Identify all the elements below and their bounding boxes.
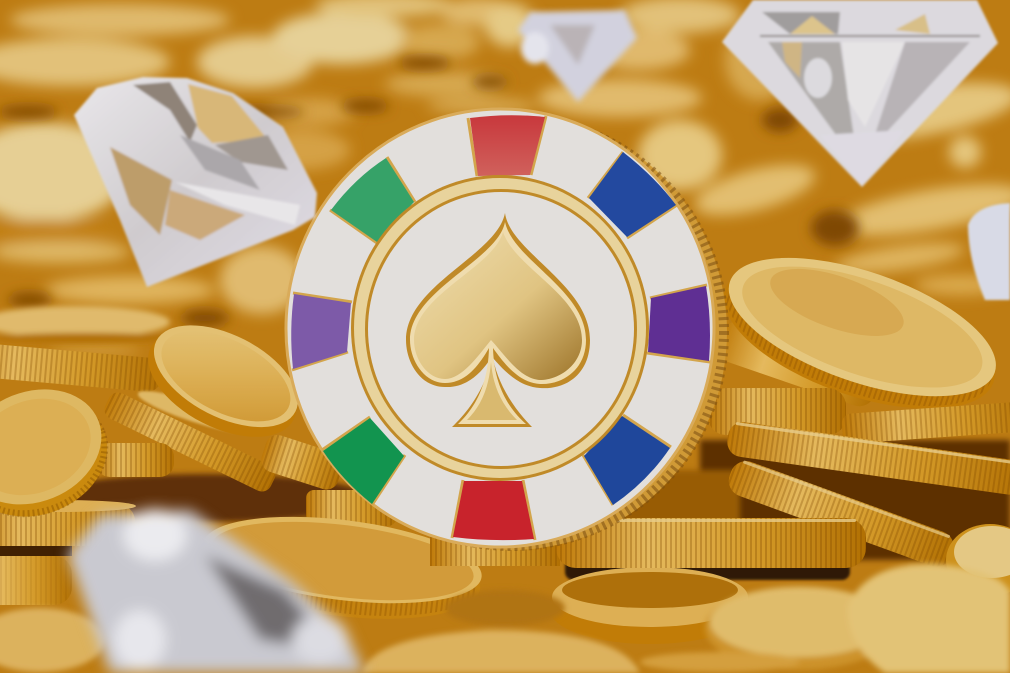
poker chip bbox=[275, 98, 727, 558]
facet: crown gold bbox=[790, 16, 835, 34]
coin: bottom blurred bbox=[362, 564, 1010, 673]
coin: ribbed strip by chip bbox=[258, 432, 346, 493]
facet: girdle bbox=[760, 35, 980, 37]
coin: ribbed short bbox=[708, 388, 846, 435]
facet: dark reflection bbox=[133, 82, 197, 142]
facet: lower gold right bbox=[165, 190, 245, 240]
diamond: upper right bbox=[722, 0, 998, 187]
facet: white kite bbox=[842, 42, 905, 127]
chip: reeded gold rim bbox=[295, 114, 727, 550]
coin: ribbed long bbox=[725, 420, 1010, 497]
facet: white blob bbox=[804, 58, 832, 98]
coin: lower left ribbed bbox=[0, 500, 136, 546]
coin: bottom left blurred bbox=[0, 608, 105, 672]
facet: pavilion right bbox=[870, 42, 970, 150]
dark gap under horizontal coin bbox=[565, 558, 850, 580]
facet: pavilion grey left bbox=[768, 42, 858, 165]
coins: left pile bbox=[0, 303, 486, 672]
coin: ribbed slanted bbox=[724, 457, 958, 571]
coin: left mid bbox=[131, 303, 316, 459]
coin: center bottom bbox=[550, 567, 750, 644]
coin: small ribbed strip bbox=[96, 443, 174, 477]
coin: horizontal ribbed bbox=[556, 518, 866, 568]
coin: right edge face bbox=[946, 524, 1010, 596]
chip: gold inner ring bbox=[351, 175, 649, 481]
background: dark gaps bbox=[0, 57, 859, 326]
coin: tilted ribbed strip bbox=[101, 389, 279, 495]
diamond: right edge bbox=[968, 203, 1010, 300]
facet: light bar bbox=[175, 182, 300, 225]
icon: gold spade bbox=[406, 213, 590, 427]
facet: lavender lower bbox=[820, 130, 905, 185]
coin: ribbed strip top left bbox=[0, 340, 163, 393]
facet: gold window bbox=[188, 84, 268, 143]
facet: crown band bbox=[762, 12, 840, 34]
coin: stacked strips under chip bbox=[306, 490, 396, 526]
diamond: upper left bbox=[74, 77, 317, 287]
coins: right pile bbox=[362, 229, 1010, 673]
facet: grey band bbox=[215, 135, 288, 170]
diamond: small top center bbox=[518, 10, 637, 102]
diamond: bottom left blurred bbox=[68, 509, 365, 673]
coin: lower left small bbox=[0, 556, 72, 605]
facet: lower gold left bbox=[110, 147, 172, 235]
facet: pavilion gold bbox=[782, 42, 802, 78]
coin: blurred stripe left bbox=[0, 306, 175, 343]
facet: crown gold right bbox=[895, 14, 930, 34]
dark gap left bbox=[0, 546, 72, 556]
dark gap center bbox=[610, 470, 740, 530]
dark gap behind right pile bbox=[700, 440, 1010, 560]
chip: gold dividers bbox=[292, 116, 710, 540]
coin: bottom center left bbox=[197, 503, 486, 633]
facet: dark center bbox=[180, 135, 260, 190]
coin: ribbed behind large coin bbox=[713, 317, 883, 411]
coin: pale stack behind tilted strip bbox=[135, 384, 255, 440]
coin: ribbed under chip bbox=[430, 530, 560, 566]
chip: coloured segments bbox=[291, 115, 710, 540]
coin: ribbed top right bbox=[841, 401, 1010, 444]
dark gap under left pile bbox=[40, 474, 370, 522]
coin: large right bbox=[706, 229, 1010, 439]
coin: far left bbox=[0, 369, 125, 537]
chip: white face bbox=[275, 98, 725, 558]
